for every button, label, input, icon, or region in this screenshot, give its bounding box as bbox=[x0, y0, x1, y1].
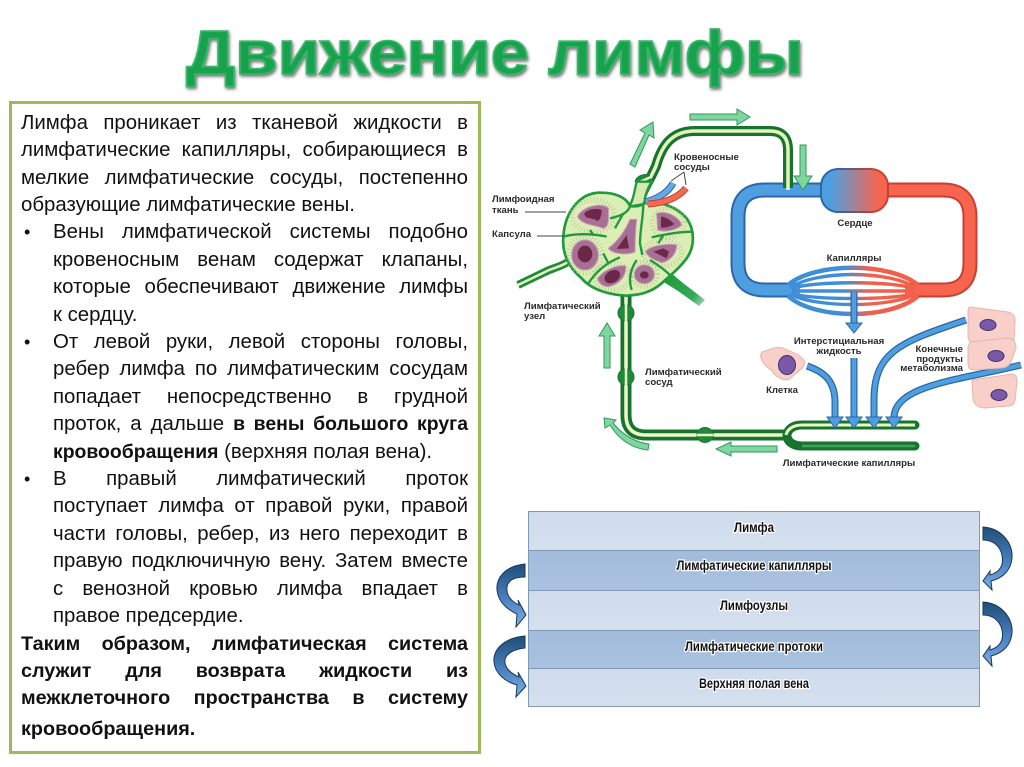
row: Лимфатические капилляры: Лимфатические капилляры bbox=[676, 557, 832, 573]
labels: Лимфатические капилляры bbox=[783, 458, 915, 469]
panel: text description: кровообращения (верхняя полая вена). bbox=[53, 441, 432, 463]
labels: Интерстициальная bbox=[794, 336, 884, 347]
panel: text description: части головы, ребер, из него переходит в bbox=[53, 523, 468, 545]
label leader lines bbox=[525, 172, 686, 236]
lymphatic capillaries bbox=[786, 425, 915, 446]
arrow: fluid to lymph bbox=[850, 358, 858, 418]
icon: cell left bbox=[761, 347, 805, 380]
arrow: left 2 bbox=[494, 636, 526, 697]
heart bbox=[821, 169, 888, 212]
panel: text description: к сердцу. bbox=[53, 304, 137, 326]
panel: text description: Таким образом, лимфатическая система bbox=[21, 633, 468, 655]
valve centres bbox=[626, 177, 713, 435]
panel: text description: • bbox=[24, 332, 30, 352]
blood circulation loop bbox=[738, 169, 970, 314]
arrow: left 1 bbox=[497, 564, 526, 627]
title: Движение лимфы bbox=[186, 19, 804, 88]
labels: сосуд bbox=[645, 377, 673, 388]
row: Лимфатические протоки: Лимфатические протоки bbox=[685, 638, 823, 654]
afferent vessel bbox=[518, 262, 568, 285]
labels: Лимфатический bbox=[645, 367, 722, 378]
arrow: right 2 bbox=[983, 602, 1012, 666]
labels: продукты bbox=[916, 354, 963, 365]
panel: text description: правое предсердие. bbox=[53, 605, 244, 627]
capillary bed bbox=[788, 268, 918, 314]
arrow: up right bbox=[630, 122, 654, 167]
labels: Лимфатический bbox=[524, 301, 601, 312]
row: Лимфа: Лимфа bbox=[734, 519, 774, 535]
labels: Конечные bbox=[915, 344, 963, 355]
labels: Капсула bbox=[492, 229, 532, 240]
arrow: top bbox=[690, 109, 750, 125]
light green flow arrows bbox=[599, 109, 812, 456]
panel: text description: с венозной кровью лимфа впадает в bbox=[53, 578, 468, 600]
panel: text description: мелкие лимфатические сосуды, постепенно bbox=[21, 167, 468, 189]
panel: text description: Лимфа проникает из тканевой жидкости в bbox=[21, 112, 468, 134]
panel: text description: правую подключичную вену. Затем вместе bbox=[53, 550, 468, 572]
labels: узел bbox=[524, 311, 545, 322]
upper efferent vessel bbox=[639, 131, 788, 204]
blue arrows bbox=[807, 292, 1021, 418]
row: Верхняя полая вена bbox=[528, 668, 980, 706]
row: Лимфоузлы: Лимфоузлы bbox=[720, 597, 788, 613]
radial fibres bbox=[568, 200, 684, 290]
panel: text description: • bbox=[24, 222, 30, 242]
icon: cell 2 bbox=[968, 338, 1016, 370]
row: Лимфатические протоки bbox=[528, 630, 980, 668]
panel: text description: От левой руки, левой стороны головы, bbox=[53, 331, 468, 353]
panel: text description: проток, а дальше в вены большого круга bbox=[53, 413, 468, 435]
blood vessels at node bbox=[646, 183, 686, 204]
efferent thick vessel bbox=[662, 273, 705, 306]
lymphatic vessels bbox=[518, 131, 915, 446]
arrow: right 1 bbox=[983, 527, 1012, 590]
row: Лимфа bbox=[528, 512, 980, 550]
lymph node bbox=[563, 182, 693, 296]
panel: text description: поступает лимфа от правой руки, правой bbox=[53, 495, 468, 517]
arrow: down to vein bbox=[794, 145, 812, 190]
trabeculae bbox=[563, 204, 693, 290]
cells bbox=[761, 307, 1017, 408]
node stem bbox=[629, 182, 652, 207]
follicles bbox=[572, 205, 682, 287]
panel: text description bbox=[9, 101, 481, 754]
labels: Кровеносные bbox=[674, 152, 739, 163]
arrow: metabolites 1 bbox=[874, 320, 966, 418]
labels: Капилляры bbox=[827, 253, 881, 264]
panel: text description: • bbox=[24, 469, 30, 489]
labels: Клетка bbox=[766, 385, 799, 396]
blue arrowheads bbox=[827, 323, 902, 428]
panel: text description: межклеточного пространства в систему bbox=[21, 687, 468, 709]
panel: text description: кровообращения. bbox=[21, 718, 195, 740]
panel: text description: образующие лимфатические вены. bbox=[21, 194, 355, 216]
panel: text description: Вены лимфатической системы подобно bbox=[53, 221, 468, 243]
labels: Сердце bbox=[837, 218, 873, 229]
labels: метаболизма bbox=[900, 363, 964, 374]
arrow: up along vessel bbox=[599, 323, 615, 368]
lower vessel bbox=[626, 296, 790, 435]
arrow: metabolites 2 bbox=[894, 365, 1021, 418]
panel: text description: В правый лимфатический проток bbox=[53, 468, 468, 490]
icon: cell 1 bbox=[968, 307, 1015, 344]
artery: red side bbox=[885, 190, 970, 290]
labels bbox=[492, 152, 964, 469]
arrow: capillaries to fluid bbox=[850, 292, 858, 324]
germinal centres bbox=[578, 209, 674, 286]
row: Лимфоузлы bbox=[528, 590, 980, 630]
labels: сосуды bbox=[674, 162, 710, 173]
arrow: curved bottom left bbox=[604, 418, 649, 450]
panel: text description: которые обеспечивают движение лимфы bbox=[53, 276, 468, 298]
row: Верхняя полая вена: Верхняя полая вена bbox=[699, 675, 809, 691]
panel: text description: служит для возврата жидкости из bbox=[21, 660, 468, 682]
vessel valves bbox=[618, 173, 713, 442]
panel: text description: попадает непосредственно в грудной bbox=[53, 386, 468, 408]
labels: жидкость bbox=[815, 346, 862, 357]
row: Лимфатические капилляры bbox=[528, 550, 980, 590]
capsule bbox=[563, 193, 693, 296]
panel: text description: кровеносным венам содержат клапаны, bbox=[53, 249, 468, 271]
vein: blue side bbox=[738, 190, 825, 290]
labels: ткань bbox=[492, 205, 519, 216]
arrow: left along capillaries bbox=[716, 442, 777, 456]
labels: Лимфоидная bbox=[492, 194, 554, 205]
panel: text description: ребер лимфа по лимфатическим сосудам bbox=[53, 358, 468, 380]
panel: text description: лимфатические капилляры, собирающиеся в bbox=[21, 139, 468, 161]
arrow: cell to lymph bbox=[807, 366, 835, 418]
icon: cell 3 bbox=[972, 374, 1017, 408]
